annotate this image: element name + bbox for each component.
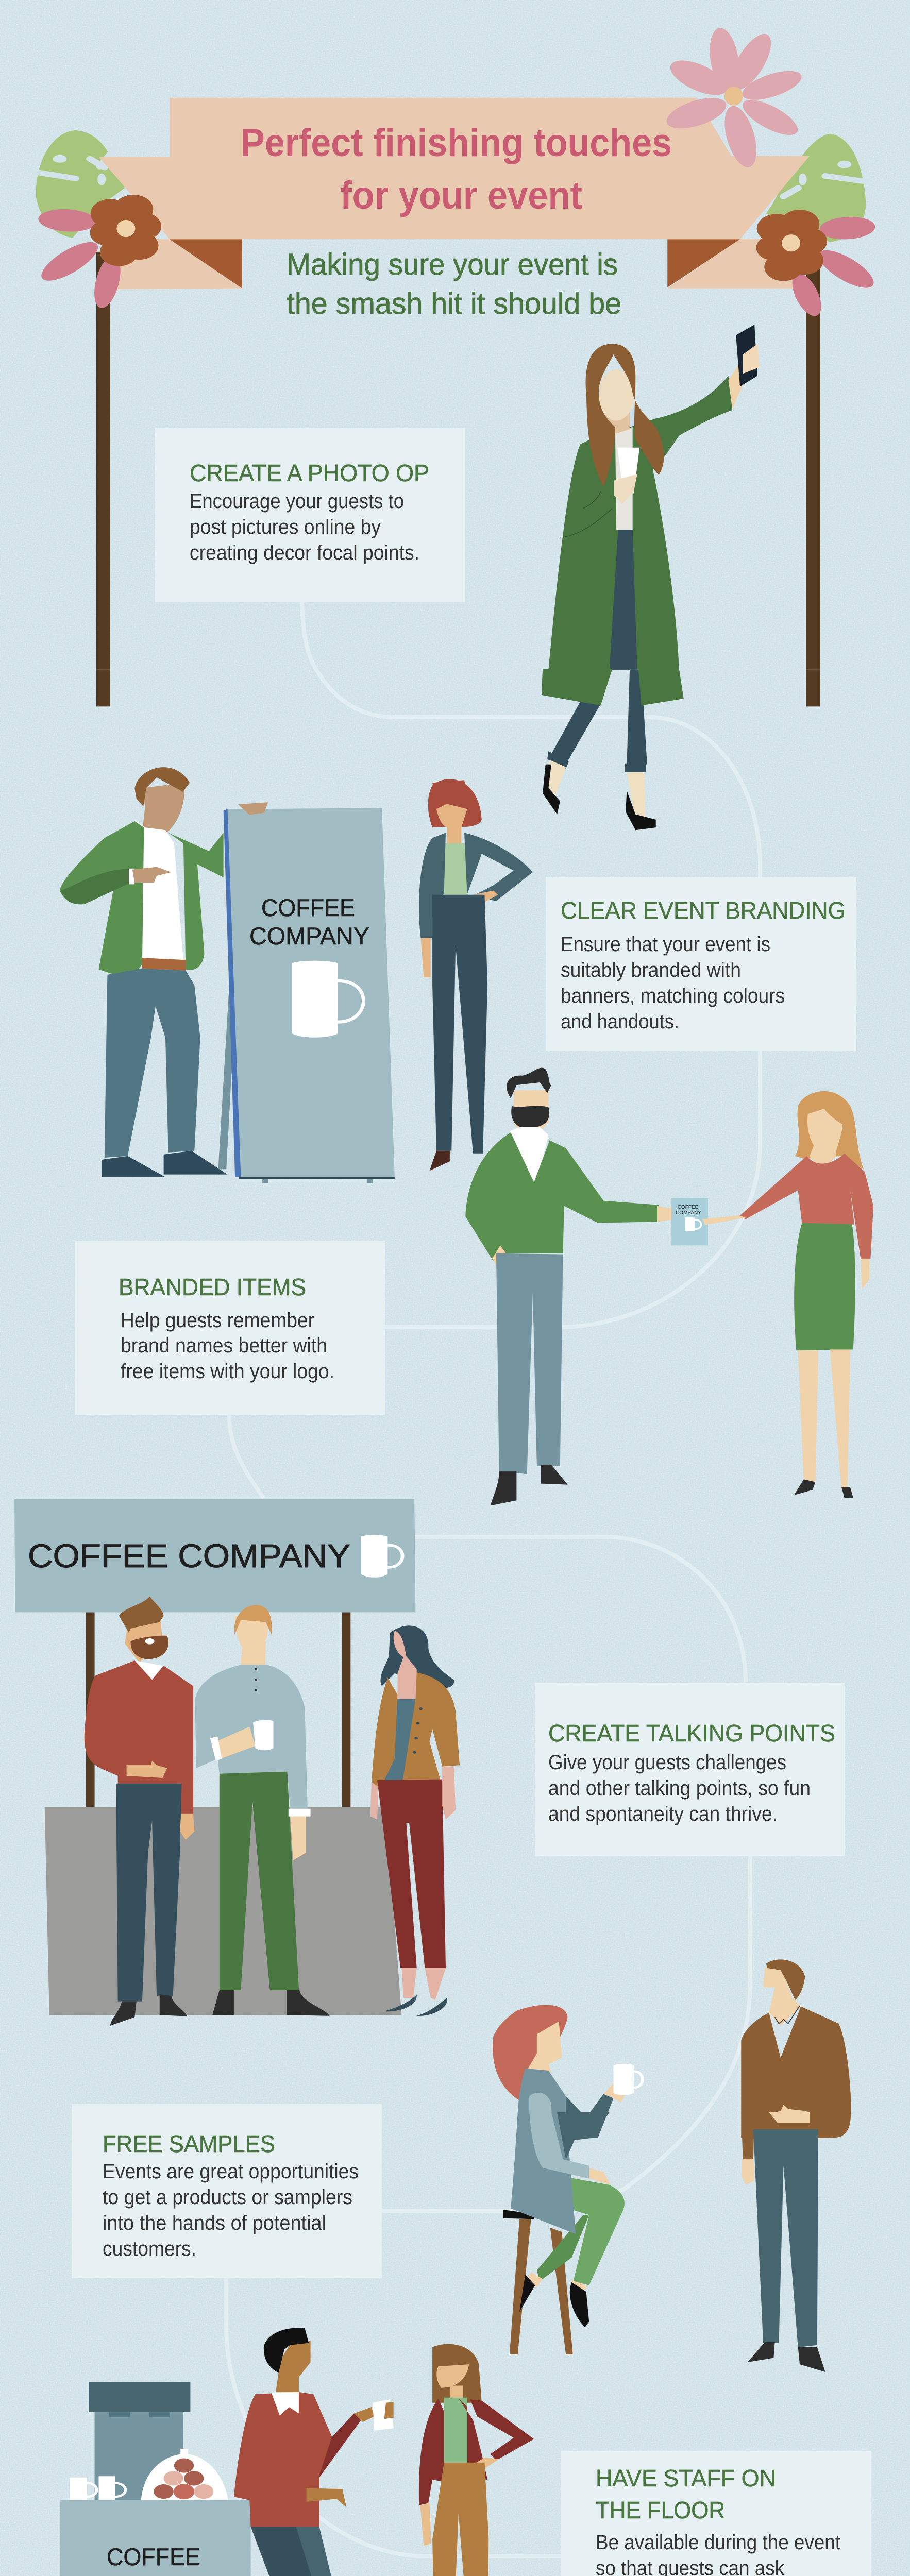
body text: [103, 2160, 359, 2260]
figure: redhead woman: [419, 779, 533, 1171]
heading: THE FLOOR: [596, 2497, 725, 2523]
title: for your event: [340, 174, 582, 217]
event arch with banner and flowers: [33, 27, 881, 706]
body text: suitably branded with: [561, 959, 741, 981]
body text: free items with your logo.: [121, 1360, 334, 1383]
body text: [548, 1751, 811, 1825]
coffee stall: [14, 1499, 415, 2015]
heading: BRANDED ITEMS: [119, 1274, 306, 1300]
body text: [596, 2531, 840, 2576]
coffee company card: [671, 1198, 708, 1245]
figure: woman in ochre trousers: [419, 2344, 534, 2576]
panel: have staff on the floor: [561, 2451, 871, 2576]
dome of samples: [141, 2449, 228, 2500]
heading: [596, 2465, 776, 2523]
coffee machine and samples counter: COFFEE: [107, 2543, 200, 2570]
heading: CREATE TALKING POINTS: [548, 1720, 835, 1747]
body text: brand names better with: [121, 1334, 327, 1357]
body text: Encourage your guests to: [190, 490, 404, 513]
body text: [561, 933, 785, 1033]
figure: bearded man in red sweater: [85, 1597, 194, 2026]
display sign: COFFEE: [261, 894, 355, 921]
subtitle: Making sure your event is: [287, 248, 618, 281]
body text: and spontaneity can thrive.: [548, 1803, 778, 1825]
body text: and other talking points, so fun: [548, 1777, 811, 1800]
body text: Give your guests challenges: [548, 1751, 786, 1774]
panel: clear event branding: [546, 877, 856, 1051]
heading: CREATE A PHOTO OP: [190, 460, 429, 486]
body text: Help guests remember: [121, 1309, 314, 1332]
panel: free samples: [72, 2104, 382, 2278]
ribbon main: [98, 98, 810, 239]
body text: post pictures online by: [190, 516, 381, 538]
figure: man in brown sweater: [741, 1959, 851, 2372]
arch posts: [96, 252, 820, 670]
subtitle: the smash hit it should be: [287, 287, 621, 320]
coffee company card: COFFEE: [678, 1205, 699, 1210]
ribbon tails: [110, 239, 802, 289]
right leaf: [766, 133, 866, 242]
body text: customers.: [103, 2238, 196, 2260]
figure: woman in ochre jacket: [370, 1625, 460, 2016]
body text: Be available during the event: [596, 2531, 840, 2554]
body text: [190, 490, 419, 564]
title: Perfect finishing touches: [241, 121, 672, 165]
heading: FREE SAMPLES: [103, 2130, 275, 2157]
left flower: [33, 195, 161, 310]
mug icon: [361, 1535, 402, 1578]
heading: HAVE STAFF ON: [596, 2465, 776, 2492]
body text: into the hands of potential: [103, 2212, 326, 2234]
coffee machine and samples counter: [60, 2382, 251, 2576]
body text: Ensure that your event is: [561, 933, 770, 956]
figure: man in blue sweater with cup: [195, 1605, 330, 2016]
figure: man with cup in red sweater: [234, 2328, 394, 2576]
body text: banners, matching colours: [561, 985, 785, 1007]
heading: CLEAR EVENT BRANDING: [561, 897, 846, 924]
panel: branded items: [75, 1241, 385, 1415]
body text: [121, 1309, 334, 1383]
figure: woman with green skirt: [702, 1091, 873, 1498]
panel: create talking points: [535, 1683, 845, 1856]
sample cups: [70, 2476, 125, 2502]
coffee stall: COFFEE COMPANY: [28, 1537, 350, 1574]
mug icon: [292, 961, 363, 1038]
title: [241, 121, 672, 217]
body text: and handouts.: [561, 1010, 679, 1033]
subtitle: [287, 248, 621, 320]
figure: seated woman on stool: [493, 2005, 643, 2354]
right flower: [756, 210, 881, 318]
pink flower: [660, 27, 807, 169]
body text: Events are great opportunities: [103, 2160, 359, 2183]
panel: create a photo op: [155, 428, 465, 602]
figure: bearded man handing cup: [465, 1068, 676, 1505]
connector path: [226, 602, 760, 2576]
display sign: [218, 802, 395, 1183]
body text: creating decor focal points.: [190, 541, 419, 564]
left leaf: [36, 130, 125, 238]
coffee company card: COMPANY: [676, 1210, 701, 1216]
display sign: COMPANY: [249, 922, 369, 950]
body text: to get a products or samplers: [103, 2186, 352, 2209]
figure: man pointing at sign: [60, 767, 228, 1177]
figure: woman taking selfie: [542, 325, 759, 830]
